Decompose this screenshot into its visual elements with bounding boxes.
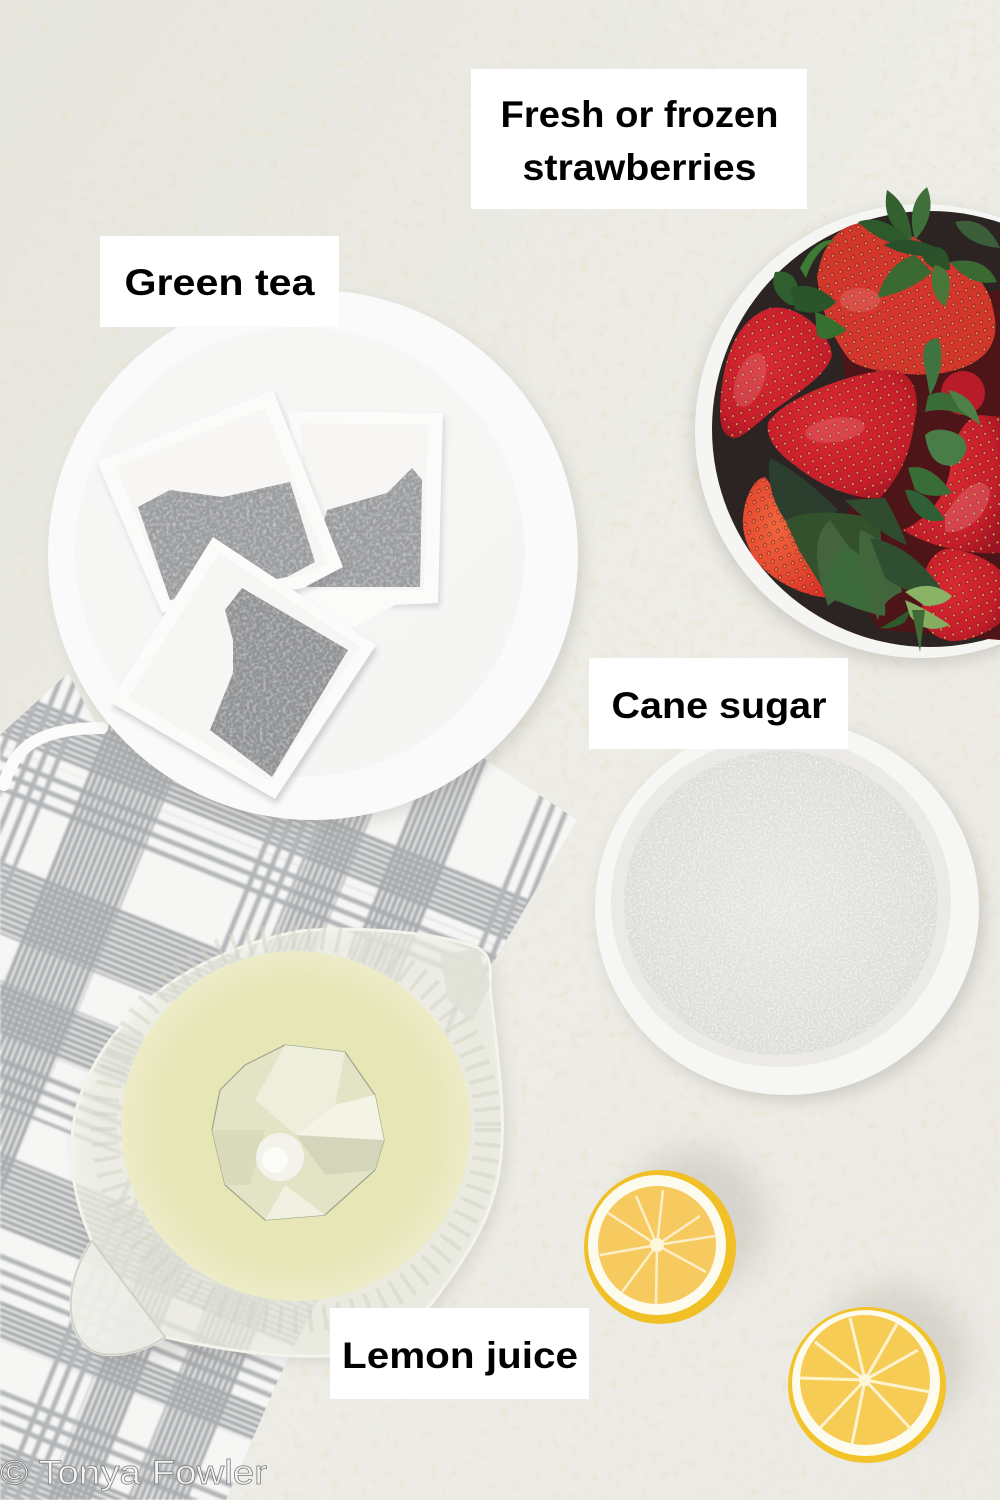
icon: lemon half bottom: [788, 1307, 946, 1463]
label: Cane sugar: [589, 658, 848, 749]
icon: glass citrus juicer with lemon juice: [71, 929, 503, 1356]
lemon shadow: [623, 1148, 767, 1292]
tea bag: right: [288, 411, 445, 632]
strawberry leaves: top crown: [858, 187, 1000, 307]
panel: bowl of strawberries: [695, 187, 1000, 658]
panel: bowl of cane sugar: [595, 721, 979, 1095]
tea bag: front: [110, 537, 378, 804]
lemon juice: [121, 951, 471, 1301]
juicer ribs: [104, 936, 488, 1320]
panel: white plate: [48, 290, 578, 820]
sugar fill: [624, 751, 938, 1055]
lemon shadow: [821, 1284, 969, 1432]
strawberry leaves: bottom crown: [769, 458, 952, 652]
strawberry leaves: right cluster: [905, 338, 980, 521]
label: Cane sugar: Cane sugar: [612, 685, 826, 726]
label: Lemon juice: Lemon juice: [342, 1335, 578, 1376]
label: Fresh or frozen strawberries: [471, 69, 807, 209]
strawberry: center: [768, 370, 917, 498]
icon: green tea bags: [97, 390, 445, 804]
icon: lemon half top: [584, 1170, 736, 1324]
plate shadow: [54, 298, 582, 826]
juicer handle: [71, 1241, 165, 1355]
label: Green tea: [100, 236, 339, 327]
strawberry: lower left: [743, 477, 829, 598]
bowl shadow: [692, 209, 1000, 665]
label: Fresh or frozen strawberries: strawberries: [522, 147, 756, 188]
strawberry: left: [720, 307, 832, 438]
strawberry: top large: [817, 223, 995, 375]
label: Green tea: Green tea: [124, 262, 315, 303]
bowl back layer behind berries: [830, 290, 1000, 640]
sugar bowl shadow: [600, 728, 984, 1100]
juicer cone: [212, 1045, 384, 1220]
panel: folded plaid towel: [0, 670, 600, 1500]
strawberry: right: [903, 415, 1000, 553]
towel folded loop: [4, 728, 102, 785]
strawberry leaves: left cluster: [773, 240, 847, 339]
juicer shadow: [76, 935, 507, 1362]
tea bag: left: [97, 390, 345, 617]
juicer spout: [440, 948, 490, 1022]
strawberry glossy highlights: [727, 288, 880, 446]
strawberry: small back: [941, 371, 985, 415]
label: Lemon juice: [330, 1308, 589, 1399]
label: Fresh or frozen strawberries: Fresh or frozen: [500, 94, 778, 135]
strawberry: lower right: [921, 549, 1000, 641]
watermark: © Tonya Fowler: [0, 1454, 267, 1492]
